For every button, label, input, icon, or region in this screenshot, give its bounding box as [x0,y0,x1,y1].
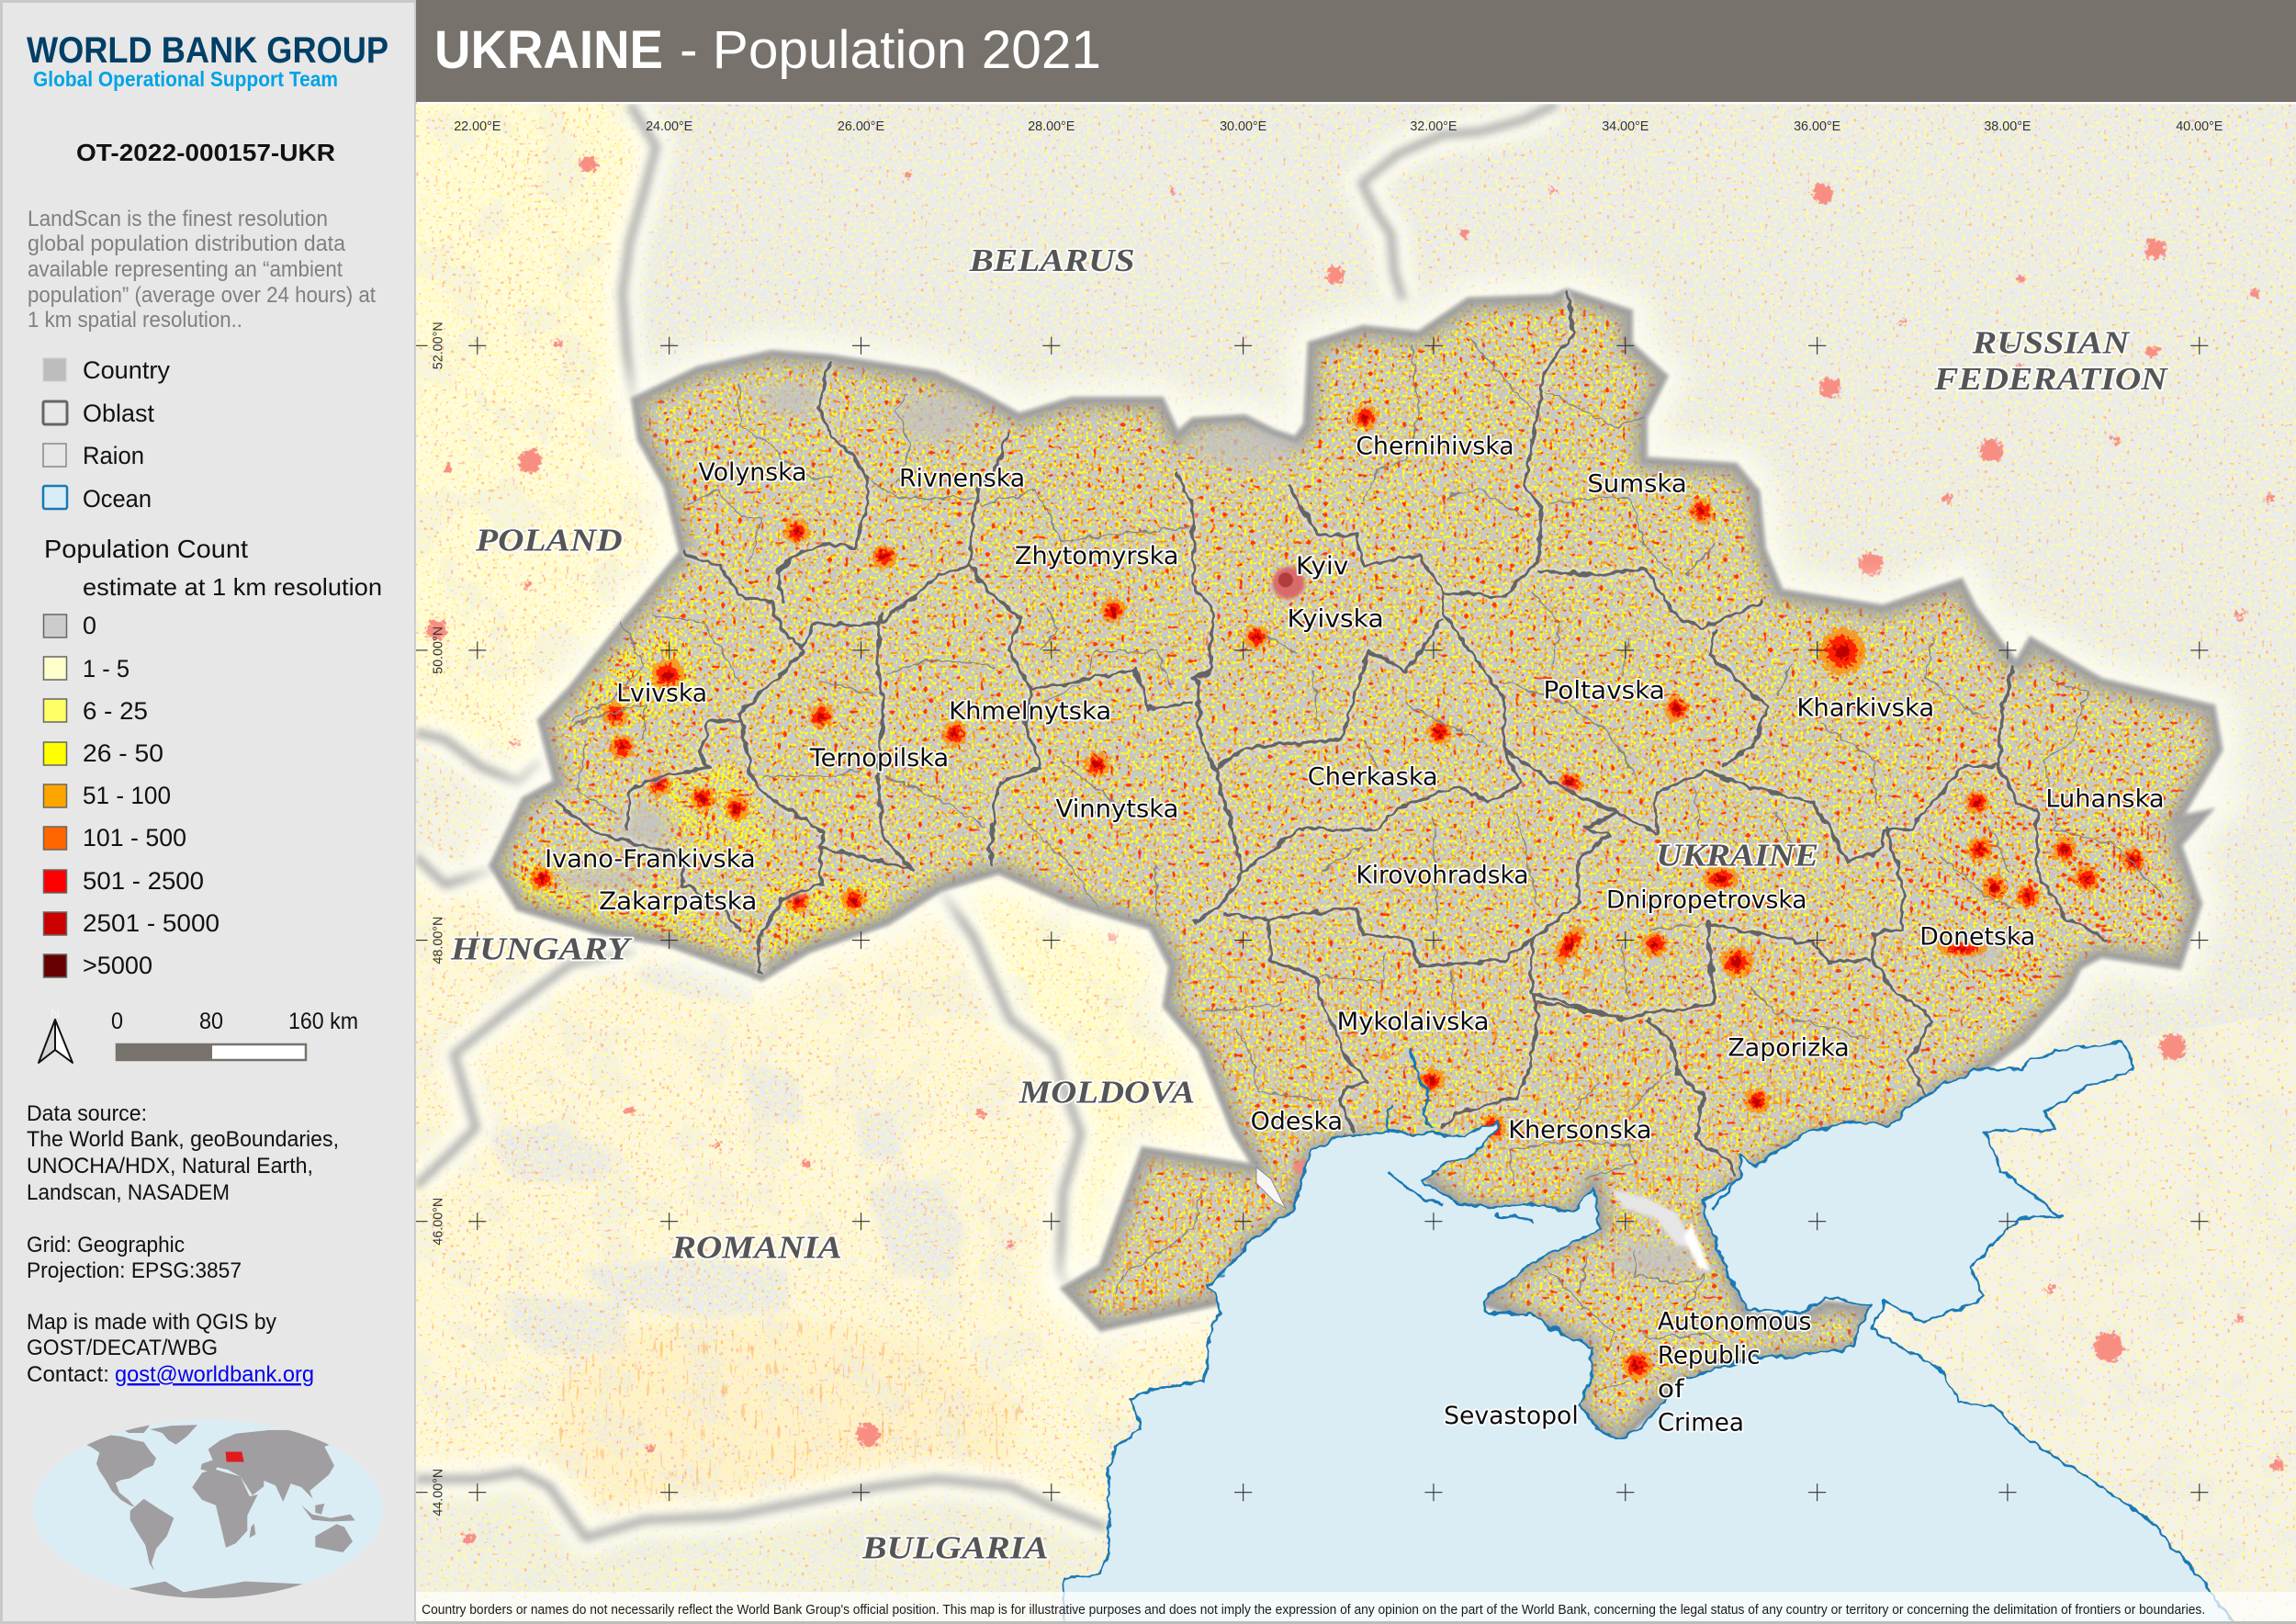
city clusters [529,405,2146,1380]
rivers and spits [1388,1047,1741,1220]
oblast labels: Khersonska [1508,1117,1651,1145]
country labels: ROMANIA [671,1230,842,1266]
data source and credits: Data source: [27,1101,147,1126]
pale orange speckle across neighbours [416,104,2296,1624]
legend: boundaries: Oblast [83,400,154,427]
description text: available representing an “ambient [28,257,343,282]
neighbouring countries [416,104,2296,1624]
legend: population count: 51 - 100 [83,782,171,809]
longitude labels: 24.00°E [646,119,692,134]
oblast labels: Kyivska [1287,605,1384,633]
longitude labels: 38.00°E [1984,119,2032,134]
oblast labels: Kirovohradska [1356,862,1529,889]
data source and credits: Projection: EPSG:3857 [27,1258,242,1283]
oblast labels: Crimea [1658,1410,1744,1438]
orange speckle [416,278,2296,1479]
neighbour cities [426,155,2283,1557]
data source and credits: Landscan, NASADEM [27,1180,230,1205]
oblast labels: Ivano-Frankivska [545,846,756,874]
Sivash lagoon flats [1611,1190,1710,1271]
country fill: Slovakia [416,732,518,885]
latitude labels: 48.00°N [432,917,446,964]
country labels: MOLDOVA [1019,1075,1195,1111]
data source and credits: Contact: [27,1362,109,1387]
scale bar: 0 [111,1009,123,1034]
title [434,20,1101,80]
legend: population count: 101 - 500 [83,824,186,851]
oblast labels: Zaporizka [1728,1035,1850,1063]
description text: 1 km spatial resolution.. [28,308,242,333]
logo: World Bank Group: WORLD BANK GROUP [27,30,388,71]
country labels: HUNGARY [450,930,634,966]
data source and credits: UNOCHA/HDX, Natural Earth, [27,1154,313,1179]
data source and credits: Map is made with QGIS by [27,1310,276,1335]
oblast labels: Republic [1658,1342,1760,1370]
Ukraine border line [492,291,2220,1446]
red speckle [416,278,2296,1479]
country labels: UKRAINE [1656,837,1818,873]
latitude labels: 50.00°N [432,626,446,674]
latitude labels [432,321,446,1517]
data source and credits: gost@worldbank.org [115,1362,314,1387]
header bar [416,0,2296,102]
empty forest and marsh zones [557,381,2006,1277]
country fill: Hungary [416,857,634,1186]
denser western settlement [488,589,929,1000]
oblast labels: Zhytomyrska [1015,543,1178,570]
longitude labels [454,119,2223,134]
country labels: BELARUS [968,242,1135,278]
country labels: FEDERATION [1933,361,2169,397]
oblast labels: Lvivska [616,681,707,708]
oblast labels: Zakarpatska [599,888,757,916]
oblast labels: Vinnytska [1056,796,1178,824]
legend: population count: estimate at 1 km resolution [83,573,382,601]
legend: boundaries: Country [83,356,170,384]
latitude labels: 46.00°N [432,1198,446,1246]
legend: population count: 2501 - 5000 [83,909,219,937]
map frame [416,104,2296,1624]
icon: north arrow: N [51,1006,60,1021]
data source and credits: Grid: Geographic [27,1233,185,1257]
data source and credits: The World Bank, geoBoundaries, [27,1127,339,1152]
country fill: Poland [416,104,682,782]
pale yellow speckle across neighbours [416,104,2296,1624]
Kyiv city [1273,567,1305,599]
legend: population count: Population Count [44,535,248,563]
oblast labels: Volynska [699,459,807,487]
scale bar [111,1009,358,1061]
extra speckle in Poland and Romania [426,111,1597,1624]
longitude labels: 30.00°E [1220,119,1266,134]
country fill: Romania [416,889,1219,1538]
legend: population count: 26 - 50 [83,739,163,767]
longitude labels: 28.00°E [1028,119,1075,134]
country fill: Moldova [940,872,1256,1289]
legend: population count: >5000 [83,952,152,979]
inset: world locator map [33,1420,383,1598]
yellow speckle [416,278,2296,1479]
oblast labels: Odeska [1251,1108,1343,1135]
country fill: Russia south-east [1872,1010,2296,1624]
legend: population count: 1 - 5 [83,655,129,682]
graticule crosses [416,337,2208,1501]
gray low-population patches [416,104,2296,1624]
logo: World Bank Group: Global Operational Support Team [33,67,338,91]
latitude labels: 52.00°N [432,321,446,369]
country labels: POLAND [475,522,623,558]
Odesa city [1293,1160,1308,1175]
title: - Population 2021 [680,20,1101,80]
longitude labels: 26.00°E [838,119,884,134]
country fill: Bulgaria [416,1472,1109,1624]
oblast labels: Sevastopol [1444,1403,1579,1430]
scale bar: 80 [199,1009,223,1034]
oblast labels: Khmelnytska [949,698,1111,726]
region: Carpathian mountains with sparse population [483,959,966,1355]
Black Sea and Sea of Azov [1064,1043,2247,1624]
oblast labels [545,433,2165,1438]
oblast boundaries [555,291,2109,1175]
oblast labels: Dnipropetrovska [1606,887,1806,915]
logo: World Bank Group [27,30,388,91]
longitude labels: 22.00°E [454,119,501,134]
oblast labels: Cherkaska [1308,764,1438,792]
legend: boundaries: Ocean [83,485,152,513]
longitude labels: 32.00°E [1410,119,1457,134]
scale bar: 160 km [288,1009,358,1034]
panel: sidebar [2,2,415,1622]
data source and credits: GOST/DECAT/WBG [27,1336,218,1360]
raion boundaries [571,338,2165,1394]
denser Donbas settlement [1895,751,2217,1044]
longitude labels: 36.00°E [1794,119,1840,134]
legend: boundaries [43,356,170,513]
Dniester liman [1256,1167,1286,1208]
latitude labels: 44.00°N [432,1469,446,1517]
oblast labels: Kharkivska [1796,695,1934,723]
oblast labels: Autonomous [1658,1309,1811,1336]
oblast labels: of [1658,1376,1684,1404]
oblast labels: Sumska [1587,471,1687,499]
description text: LandScan is the finest resolution [28,207,328,231]
region: southern Romania plain [549,1318,1025,1516]
map id: OT-2022-000157-UKR [76,139,335,166]
oblast labels: Kyiv [1296,553,1348,581]
icon: north arrow [39,1006,73,1063]
oblast labels: Chernihivska [1356,433,1514,460]
disclaimer [416,1592,2296,1621]
description text: global population distribution data [28,231,346,256]
country labels: RUSSIAN [1972,324,2131,360]
neighbour country border glow [416,104,1557,1538]
legend: population count: 6 - 25 [83,697,148,725]
country labels: BULGARIA [861,1529,1049,1565]
title: UKRAINE [434,20,663,80]
panel: Ukraine population surface [416,278,2296,1479]
description text [28,207,376,333]
oblast labels: Mykolaivska [1337,1009,1490,1036]
oblast labels: Rivnenska [899,465,1025,492]
oblast labels: Ternopilska [809,745,949,773]
road streaks on the Romanian plain [542,1311,1040,1523]
data source and credits [27,1101,339,1387]
country labels [450,242,2169,1565]
inner edge shading [492,291,2220,1446]
legend: population count [44,535,382,979]
legend: boundaries: Raion [83,442,144,469]
road streaks in southern oblasts [1084,937,1919,1318]
longitude labels: 34.00°E [1602,119,1649,134]
Ukraine outer glow [492,291,2220,1446]
legend: population count: 0 [83,612,96,639]
description text: population” (average over 24 hours) at [28,283,376,308]
oblast labels: Luhanska [2045,786,2165,814]
longitude labels: 40.00°E [2176,119,2223,134]
oblast labels: Donetska [1919,923,2035,951]
legend: population count: 501 - 2500 [83,867,204,895]
oblast labels: Poltavska [1543,678,1665,705]
